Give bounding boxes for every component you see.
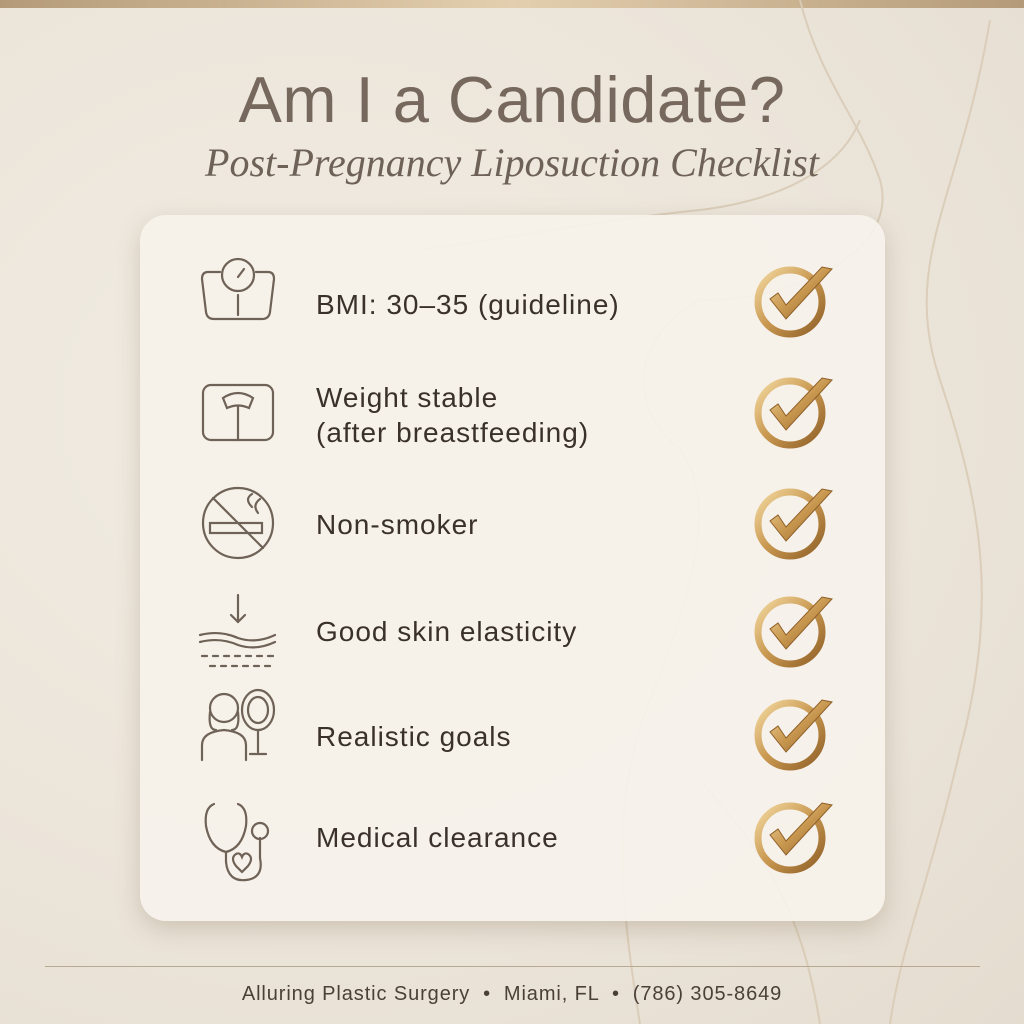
row: skin elasticity: Good skin elasticity [316, 616, 577, 647]
check 2 [758, 378, 832, 445]
panel: checklist card [140, 215, 885, 921]
checkmarks [754, 266, 833, 874]
icons [198, 258, 276, 882]
footer divider [45, 966, 980, 967]
row: weight stable [316, 382, 589, 448]
row: weight stable: (after breastfeeding) [316, 417, 589, 448]
icon: stethoscope [206, 804, 268, 880]
top gold band [0, 0, 1024, 8]
check 3 [758, 489, 832, 556]
icon: woman and mirror [202, 690, 274, 760]
footer text: Alluring Plastic Surgery • Miami, FL • (786) 305-8649 [242, 983, 782, 1005]
row: weight stable: Weight stable [316, 382, 498, 413]
row: non-smoker: Non-smoker [316, 509, 478, 540]
icon: scale dial [202, 259, 274, 319]
icon: bathroom scale [203, 385, 273, 440]
row: realistic goals: Realistic goals [316, 721, 512, 752]
title: Am I a Candidate? [239, 63, 785, 136]
icon: skin elasticity [200, 595, 275, 666]
subtitle: Post-Pregnancy Liposuction Checklist [205, 140, 819, 185]
check 5 [758, 700, 832, 767]
check 1 [758, 267, 832, 334]
icon: no smoking [203, 488, 273, 558]
check 4 [758, 597, 832, 664]
row: medical clearance: Medical clearance [316, 822, 559, 853]
row: BMI: BMI: 30–35 (guideline) [316, 289, 620, 320]
check 6 [758, 803, 832, 870]
